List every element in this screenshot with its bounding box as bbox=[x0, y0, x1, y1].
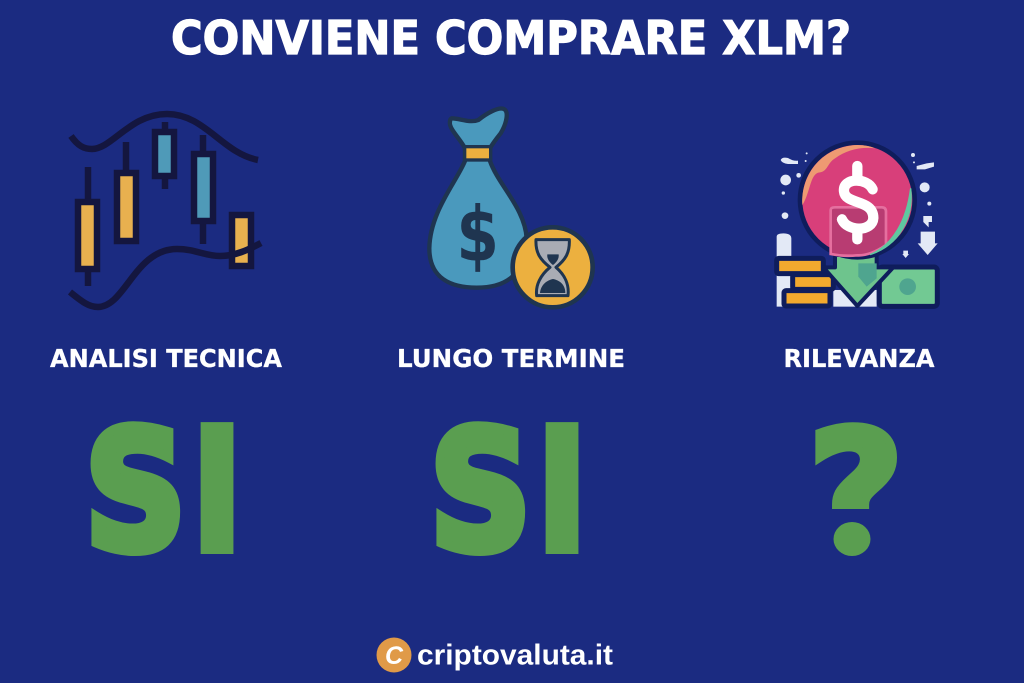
verdict: si (analisi tecnica): S bbox=[85, 397, 186, 588]
verdict: question mark (rilevanza): ? bbox=[808, 396, 904, 588]
icon: money bag with hourglass: $ bbox=[456, 189, 499, 278]
verdict: si (lungo termine) bbox=[430, 391, 590, 593]
verdict: si (analisi tecnica) bbox=[85, 391, 245, 593]
label: analisi tecnica: ANALISI TECNICA bbox=[50, 344, 283, 373]
decorative white shapes bbox=[777, 152, 938, 307]
label: rilevanza: RILEVANZA bbox=[784, 344, 935, 373]
logo: criptovaluta.it: criptovaluta.it bbox=[417, 640, 613, 672]
pink coin bbox=[800, 143, 915, 257]
label: lungo termine: LUNGO TERMINE bbox=[397, 344, 625, 373]
icon: relevance coin and arrow bbox=[777, 143, 938, 307]
coins bbox=[777, 258, 833, 306]
arrow bbox=[823, 255, 893, 306]
banknote bbox=[879, 267, 937, 306]
icon: candlestick chart bbox=[70, 114, 261, 307]
logo: criptovaluta.it: C bbox=[385, 642, 404, 670]
verdict: si (lungo termine): S bbox=[430, 397, 531, 588]
verdict: question mark (rilevanza) bbox=[815, 422, 897, 556]
icon: money bag with hourglass bbox=[429, 109, 593, 307]
title: CONVIENE COMPRARE XLM? bbox=[171, 11, 851, 65]
verdict: si (lungo termine): I bbox=[534, 391, 590, 593]
verdict: si (analisi tecnica): I bbox=[189, 391, 245, 593]
